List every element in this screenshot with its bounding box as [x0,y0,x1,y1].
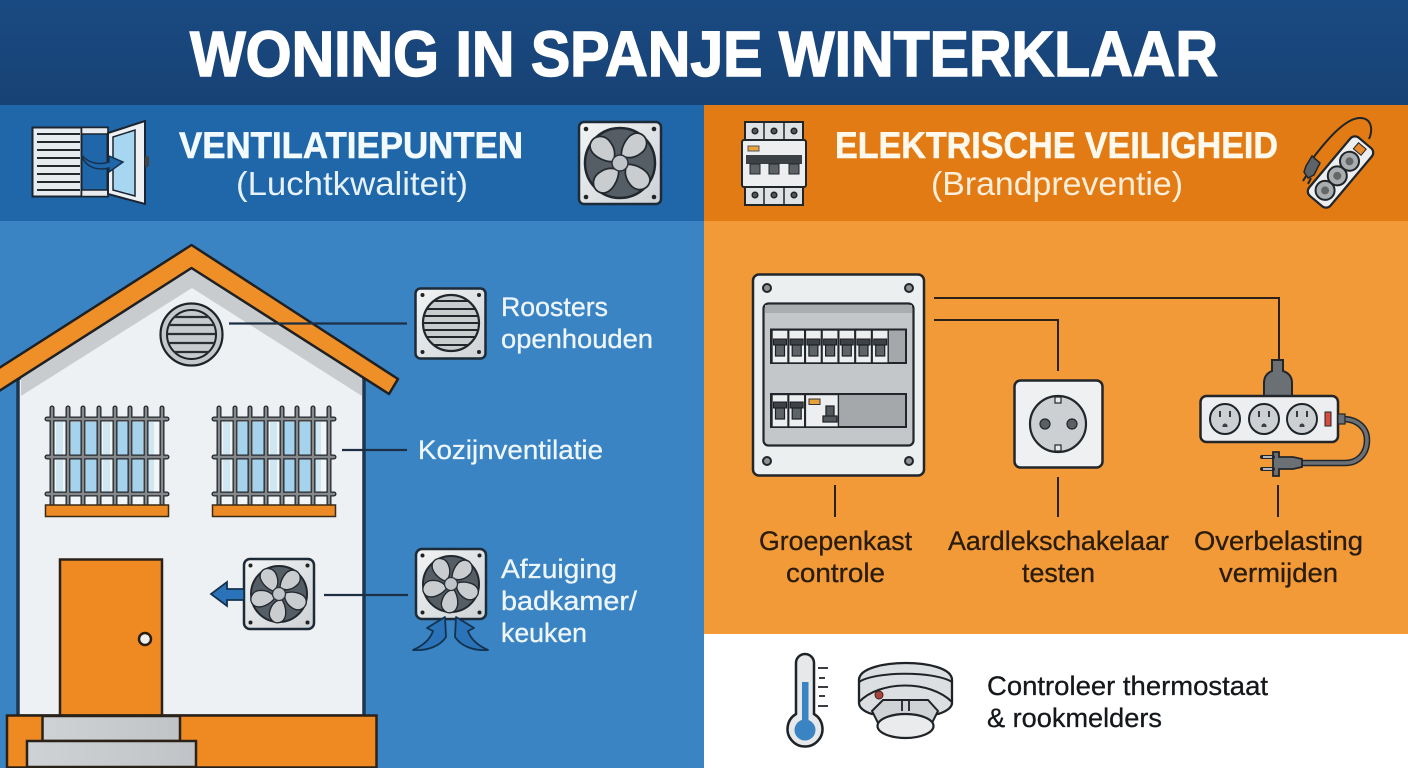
roof [0,245,398,394]
icon: round gable vent [160,304,222,366]
icon: power strip [1303,118,1376,210]
leader lines left [229,324,408,595]
icon: thermometer [788,654,828,747]
icon: smoke detector [859,663,952,738]
label: Roosters [501,292,608,322]
icon: fan [579,122,661,204]
house wall [18,266,364,716]
callout: afzuiging [413,549,638,650]
icon: fuse box [753,274,924,476]
label: overbelasting: Overbelasting [1194,526,1363,556]
label: aardlekschakelaar: testen [1022,558,1095,588]
subheading: (Luchtkwaliteit) [236,165,468,202]
label: groepenkast: controle [786,558,885,588]
background panels [0,221,1408,768]
window left [46,408,168,516]
icon: wall socket [1014,380,1102,468]
door [60,560,162,716]
icon: circuit breaker [742,122,806,205]
callout: kozijnventilatie: Kozijnventilatie [418,435,603,465]
panel header: elektrische veiligheid [704,105,1408,221]
panel header: ventilatiepunten [0,105,704,221]
icon: vent grille [416,288,486,358]
text: thermostaat and smoke alarms: & rookmelders [987,703,1162,733]
connector lines right [835,298,1279,517]
arrows: air drawn in [413,617,488,650]
house illustration [0,245,398,768]
icon: house extractor fan [211,559,314,629]
icon: open window with louvre shutter [32,121,149,204]
title: WONING IN SPANJE WINTERKLAAR [190,18,1218,90]
icon: extractor fan [416,549,486,619]
label: aardlekschakelaar: Aardlekschakelaar [948,526,1169,556]
label: badkamer/ [501,586,638,616]
label: Afzuiging [501,554,617,584]
label: keuken [501,618,587,648]
arrow: air out [211,582,244,606]
heading: VENTILATIEPUNTEN [179,125,523,166]
label: openhouden [501,324,653,354]
label: overbelasting: vermijden [1219,558,1338,588]
subheading: (Brandpreventie) [931,165,1183,202]
base and steps [7,716,376,768]
window right [212,408,336,516]
title banner [0,0,1408,105]
heading: ELEKTRISCHE VEILIGHEID [835,125,1278,166]
label: groepenkast: Groepenkast [759,526,912,556]
icon: extension strip with plug [1200,360,1367,476]
text: thermostaat and smoke alarms: Controleer thermostaat [987,671,1268,701]
callout: roosters [416,288,653,358]
